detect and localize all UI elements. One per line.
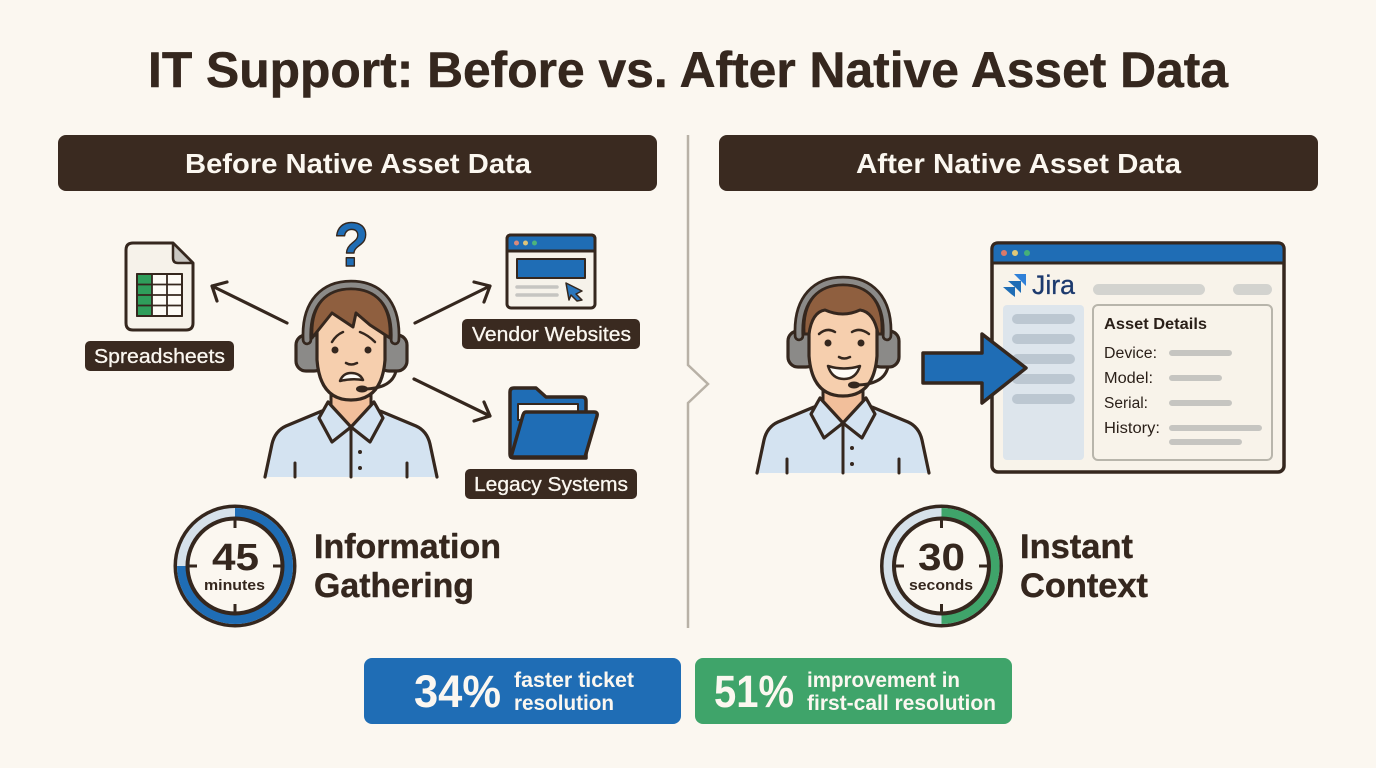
timer: 45 minutes (176, 506, 294, 626)
arrow: to spreadsheets (212, 282, 287, 323)
caption: information gathering: Information (314, 528, 501, 566)
caption: instant context: Instant (1020, 528, 1133, 566)
timer: 30 seconds: seconds (909, 577, 973, 594)
sidebar (1003, 305, 1084, 460)
label: legacy systems (465, 469, 637, 499)
stat: 51% improvement in first-call resolution: improvement in (807, 669, 960, 692)
shirt details (787, 423, 899, 473)
label: spreadsheets: Spreadsheets (94, 346, 225, 368)
caption: instant context (1020, 528, 1148, 605)
microphone (858, 367, 888, 385)
panel: after native asset data (719, 135, 1318, 626)
ear cups (296, 335, 324, 371)
caption: information gathering: Gathering (314, 567, 474, 605)
collar (811, 398, 875, 438)
asset details card: Model: (1104, 370, 1153, 387)
headband (307, 285, 395, 340)
shirt outline (757, 407, 929, 473)
divider with chevron (688, 135, 708, 628)
neck (823, 386, 863, 424)
icon: folder (510, 388, 597, 458)
face (317, 290, 385, 400)
shirt fill (265, 411, 437, 477)
ear cups (788, 331, 816, 367)
caption: instant context: Context (1020, 567, 1148, 605)
label: vendor websites: Vendor Websites (472, 324, 631, 346)
illustration: stressed support agent (265, 285, 437, 477)
icon: browser window (507, 235, 595, 308)
heading bar: before (58, 135, 657, 191)
timer: 30 seconds (882, 506, 1001, 626)
stat: 51% improvement in first-call resolution: 51% (714, 666, 794, 717)
collar (319, 402, 383, 442)
heading bar: before: Before Native Asset Data (185, 148, 531, 179)
eyes, brows, nose, mouth (332, 346, 338, 354)
microphone (366, 371, 396, 389)
stat: 34% faster ticket resolution (364, 658, 681, 724)
stat: 34% faster ticket resolution: resolution (514, 692, 614, 715)
heading bar: after (719, 135, 1318, 191)
title: IT Support: Before vs. After Native Asset Data (148, 42, 1229, 98)
icon: question mark: ? (334, 211, 369, 280)
heading bar: after: After Native Asset Data (856, 148, 1181, 179)
asset details card: Serial: (1104, 395, 1148, 412)
stat: 51% improvement in first-call resolution (695, 658, 1012, 724)
stat: 51% improvement in first-call resolution: first-call resolution (807, 692, 996, 715)
shirt fill (757, 407, 929, 473)
timer: 30 seconds: 30 (918, 537, 965, 579)
caption: information gathering (314, 528, 501, 605)
label: spreadsheets (85, 341, 234, 371)
timer: 45 minutes: minutes (204, 577, 265, 594)
asset details card: Asset Details (1104, 316, 1207, 333)
asset details card (1093, 305, 1272, 460)
hair (312, 288, 390, 338)
headband (799, 281, 887, 336)
hair (804, 284, 882, 334)
arrow: agent to jira (923, 334, 1026, 403)
label: vendor websites (462, 319, 640, 349)
app window: jira asset details (992, 243, 1284, 472)
arrow: to vendor websites (415, 282, 490, 323)
neck (331, 390, 371, 428)
label: legacy systems: Legacy Systems (474, 474, 628, 496)
arrow: to legacy systems (414, 379, 490, 421)
face (809, 286, 877, 396)
icon: jira logo (1003, 274, 1026, 297)
asset details card: Device: (1104, 345, 1157, 362)
jira wordmark: Jira (1032, 270, 1076, 300)
asset details card: History: (1104, 420, 1160, 437)
top bar placeholders (1093, 284, 1272, 295)
panel: before native asset data (58, 135, 657, 626)
illustration: happy support agent (757, 281, 929, 473)
stat: 34% faster ticket resolution: faster ticket (514, 669, 634, 692)
shirt details (295, 427, 407, 477)
shirt outline (265, 411, 437, 477)
eyes, brows, nose, mouth (824, 340, 832, 346)
icon: spreadsheet file (126, 243, 193, 330)
timer: 45 minutes: 45 (212, 537, 259, 579)
stat: 34% faster ticket resolution: 34% (414, 666, 501, 717)
